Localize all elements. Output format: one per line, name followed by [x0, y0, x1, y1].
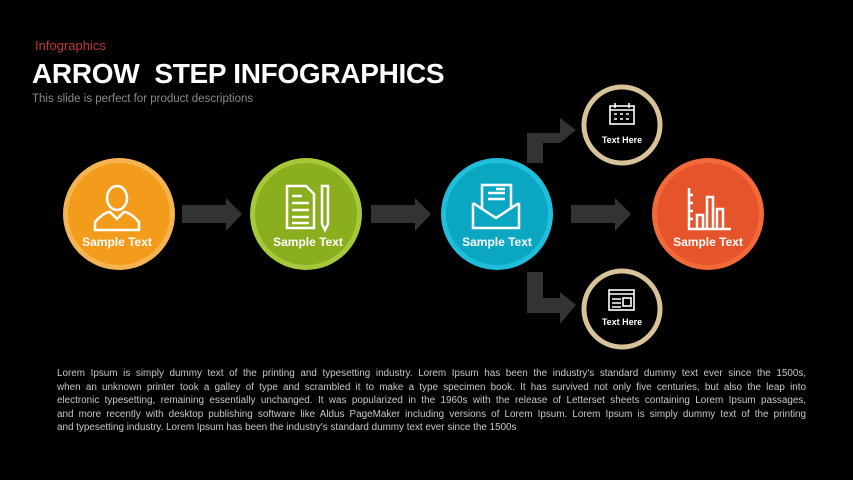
body text: [57, 368, 806, 433]
small circle bottom: [584, 271, 660, 347]
step 3: blue: [441, 158, 553, 270]
icon: calendar: [610, 103, 634, 124]
icon: browser window: [609, 290, 634, 310]
body text: electronic typesetting, remaining essentially unchanged. It was popularized in the 1960s with the release of Letterset sheets containing Lorem Ipsum passages,: [57, 395, 806, 406]
step 1: orange: Sample Text: [82, 235, 152, 249]
step 2: green: Sample Text: [273, 235, 343, 249]
icon: person: [95, 186, 139, 230]
step 1: orange: [63, 158, 175, 270]
title: ARROW STEP INFOGRAPHICS: [32, 58, 444, 89]
step 4: red: [652, 158, 764, 270]
subtitle: This slide is perfect for product descriptions: [32, 93, 253, 105]
icon: bar chart: [689, 188, 731, 229]
body text: and more recently with desktop publishing software like Aldus PageMaker including versions of Lorem Ipsum. Lorem Ipsum is simply dummy text of the printing: [57, 408, 806, 420]
arrow 3: [571, 198, 631, 231]
elbow arrow up: [527, 118, 576, 163]
icon: document and pencil: [287, 186, 328, 230]
small circle top: [584, 87, 660, 163]
elbow arrow down: [527, 272, 576, 324]
small circle top: Text Here: [602, 135, 642, 145]
arrow 2: [371, 198, 431, 231]
body text: when an unknown printer took a galley of type and scrambled it to make a type specimen book. It has survived not only five centuries, but also the leap into: [57, 382, 806, 392]
step 2: green: [250, 158, 362, 270]
arrow 1: [182, 198, 242, 231]
body text: and typesetting industry. Lorem Ipsum has been the industry's standard dummy text ever since the 1500s: [57, 422, 516, 433]
body text: Lorem Ipsum is simply dummy text of the printing and typesetting industry. Lorem Ipsum has been the industry's standard dummy text ever since the 1500s,: [57, 368, 806, 379]
icon: envelope: [473, 185, 519, 228]
small circle bottom: Text Here: [602, 317, 642, 327]
step 3: blue: Sample Text: [462, 235, 532, 249]
step 4: red: Sample Text: [673, 235, 743, 249]
tag: Infographics: Infographics: [35, 38, 106, 53]
